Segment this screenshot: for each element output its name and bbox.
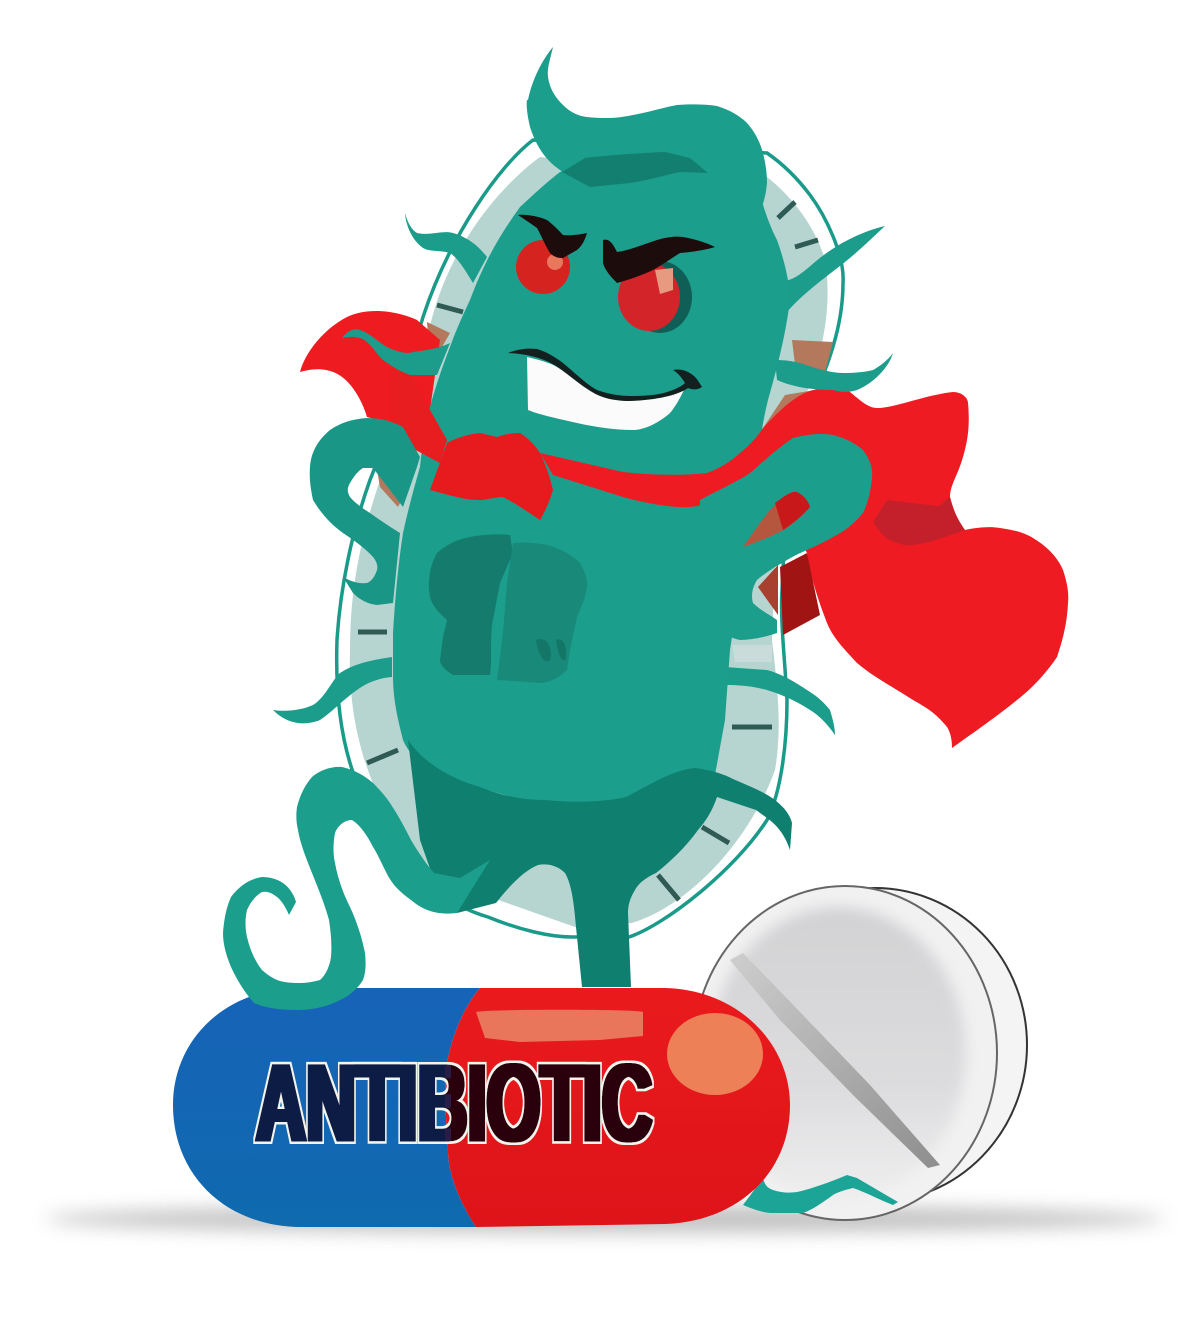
chest emblem [429,534,587,683]
shell window under right arm [732,645,772,662]
tablet back rim [723,888,1027,1202]
cape [300,311,1068,748]
red half [446,988,790,1227]
thin flagellum [743,1175,898,1213]
cape fold [873,497,965,545]
left scarf band [390,367,447,463]
highlight bar [476,1010,643,1042]
tablet face [693,886,997,1220]
left arm [310,418,420,605]
right eye [628,261,692,333]
capsule label: ANTIBIOTIC [256,1042,652,1165]
bow [430,433,553,520]
dark cape underside [780,553,820,635]
left brow [518,215,587,258]
left eye [516,240,570,294]
capsule [173,988,790,1227]
cell wall shell [337,140,843,937]
right brow [603,237,715,283]
bacterium body [393,47,792,987]
tablet [693,886,1027,1220]
right cape [763,389,1068,748]
eyes [516,215,715,333]
brown patches [377,322,833,507]
shell ticks [358,202,818,900]
hair tuft [527,47,767,212]
score line [730,953,940,1168]
tail [223,767,490,1010]
right arm [700,434,872,640]
right scarf band [540,393,830,507]
ground shadow [45,1205,1165,1233]
shell inner band [350,157,828,927]
grin [508,349,702,430]
highlight oval [667,1013,763,1095]
blue half [173,988,480,1227]
left cape [300,311,447,463]
hair shadow [562,152,708,187]
pelvis and legs [408,740,792,987]
bacterium flagella [273,213,893,735]
scarf and bow [390,367,830,520]
